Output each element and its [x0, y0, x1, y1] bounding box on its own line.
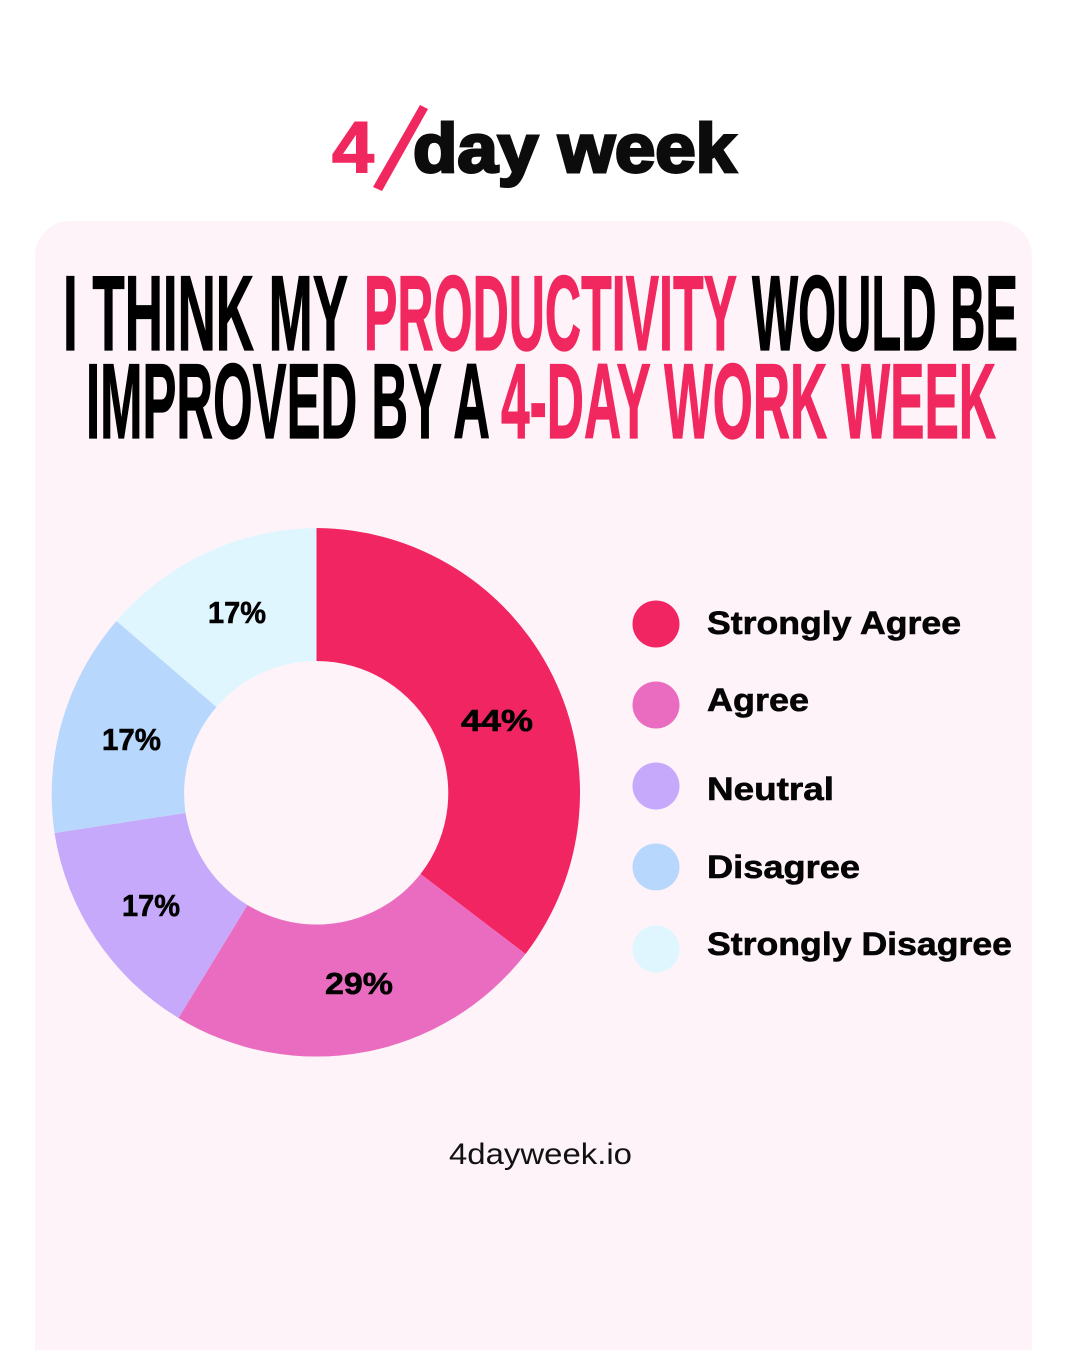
segment: strongly agree 44%: [316, 528, 580, 954]
value labels: [102, 595, 533, 1001]
legend item: strongly disagree: [632, 926, 1012, 972]
title: IMPROVED BY A: [86, 341, 490, 461]
legend item: neutral: [632, 762, 834, 810]
legend: [632, 600, 1012, 972]
segment: agree 29%: [178, 874, 526, 1057]
panel: background card: [35, 221, 1032, 1350]
legend item: agree: Agree: [707, 682, 809, 718]
logo: 4/day week: day week: [413, 110, 737, 187]
legend item: disagree: [632, 844, 860, 890]
title: [63, 253, 1018, 461]
segment: disagree 17%: [52, 621, 216, 833]
legend item: disagree: Disagree: [707, 849, 860, 885]
value labels: 29%: [325, 966, 393, 1001]
legend item: strongly agree: Strongly Agree: [707, 605, 961, 641]
legend item: agree: [632, 682, 809, 728]
legend item: neutral: Neutral: [707, 771, 834, 807]
segment: strongly disagree 17%: [116, 528, 316, 707]
title: I THINK MY: [63, 253, 348, 373]
value labels: 17%: [102, 722, 161, 757]
logo: 4/day week: [332, 105, 737, 191]
donut chart: [52, 528, 580, 1057]
legend item: strongly agree: [632, 600, 961, 648]
website url: 4dayweek.io: [449, 1138, 632, 1171]
legend item: strongly disagree: Strongly Disagree: [707, 926, 1012, 962]
segment: neutral 17%: [54, 813, 248, 1018]
logo: 4/day week: 4: [332, 108, 374, 188]
value labels: 17%: [122, 888, 180, 923]
value labels: 44%: [461, 703, 533, 738]
value labels: 17%: [208, 595, 266, 630]
